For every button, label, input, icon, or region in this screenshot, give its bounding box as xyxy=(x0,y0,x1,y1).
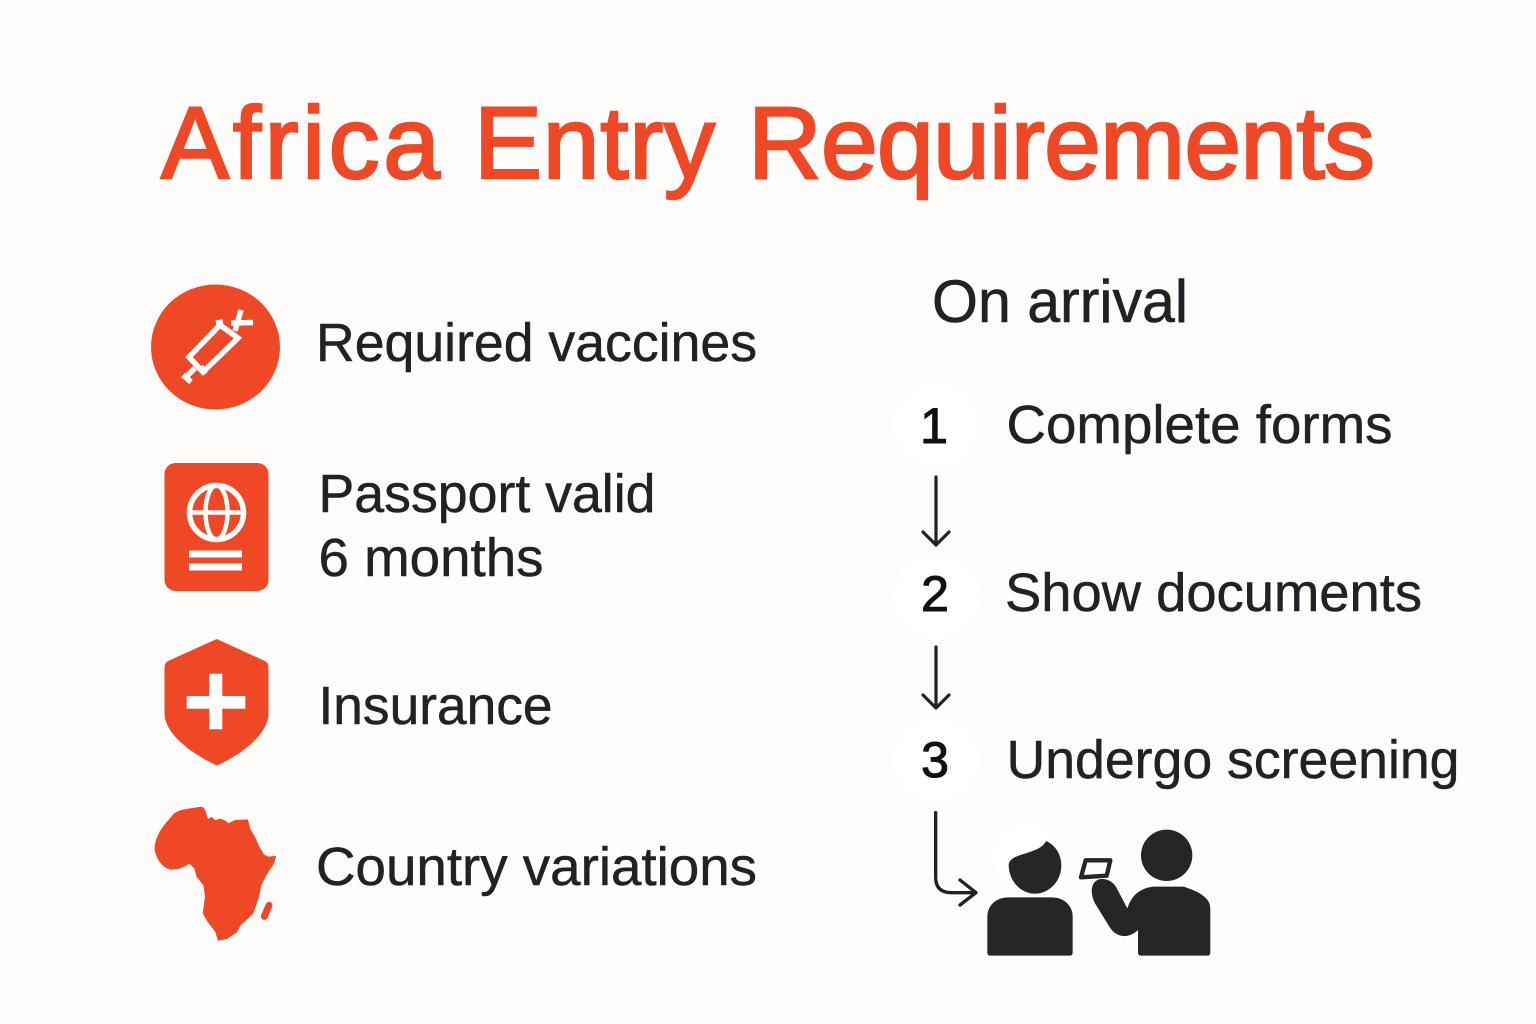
step 2: 2 xyxy=(921,566,949,622)
step 1 xyxy=(894,383,1392,467)
text: insurance: Insurance xyxy=(318,676,552,736)
text: required vaccines: Required vaccines xyxy=(316,313,757,373)
title: Africa xyxy=(161,86,440,200)
step 2: Show documents xyxy=(1005,563,1422,623)
icon: syringe in circle xyxy=(151,284,280,410)
step 1: 1 xyxy=(920,398,948,454)
arrow: step 3 to screening xyxy=(936,813,976,905)
arrow: step 2 to 3 xyxy=(923,647,949,708)
text: passport valid 6 months xyxy=(318,464,656,588)
icon: traveller xyxy=(987,824,1073,956)
step 3: 3 xyxy=(921,732,949,788)
step 3 xyxy=(894,718,1460,802)
icon: medical shield xyxy=(164,639,268,766)
arrow: step 1 to 2 xyxy=(923,477,949,545)
text: passport valid 6 months: Passport valid xyxy=(318,464,656,524)
title: Requirements xyxy=(748,86,1375,200)
text: passport valid 6 months: 6 months xyxy=(318,528,544,588)
icon: officer with scanner xyxy=(1081,830,1210,956)
panel: requirements list xyxy=(151,284,757,940)
step 2 xyxy=(894,555,1422,639)
panel: on arrival steps xyxy=(894,268,1460,956)
icon: passport xyxy=(164,463,268,591)
icon: africa map xyxy=(155,807,275,940)
text: country variations: Country variations xyxy=(316,837,757,897)
icon: screening people xyxy=(987,824,1210,956)
title: Entry xyxy=(474,86,715,200)
step 3: Undergo screening xyxy=(1006,730,1460,790)
heading: on arrival: On arrival xyxy=(932,268,1188,335)
step 1: Complete forms xyxy=(1006,395,1392,455)
